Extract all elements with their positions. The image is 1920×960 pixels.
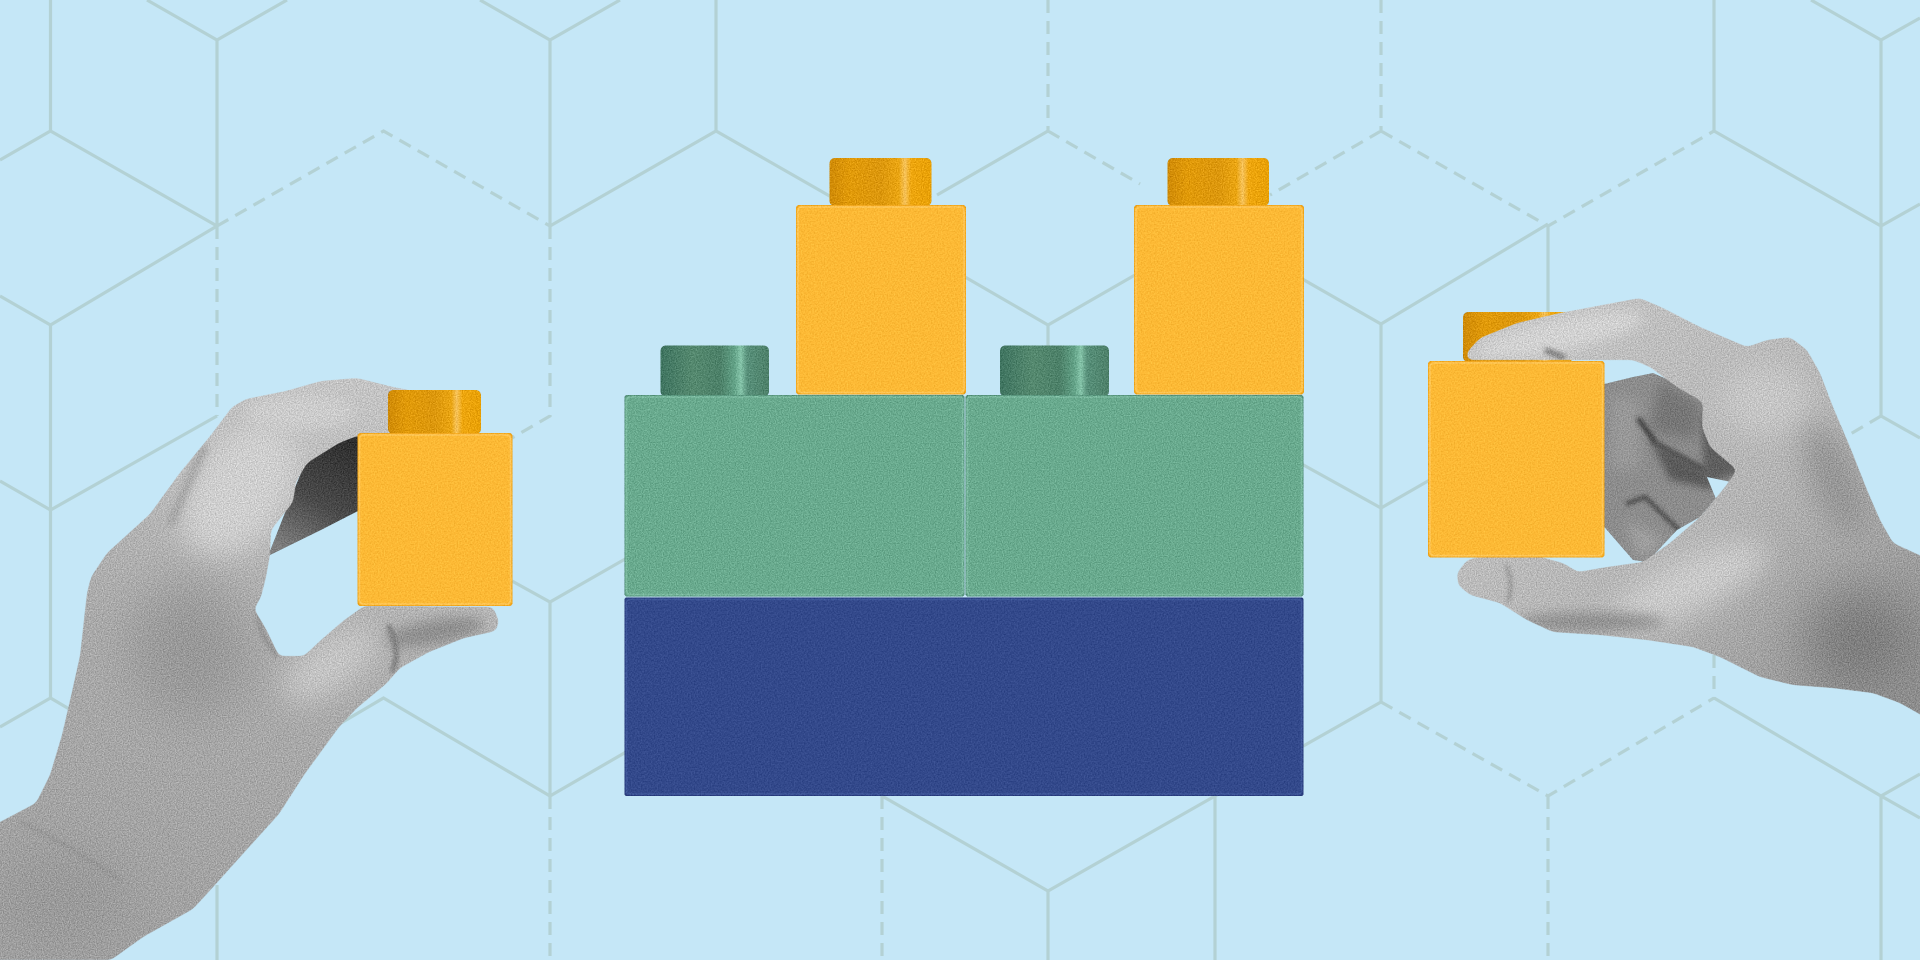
stud: held left brick [388,390,481,434]
gap between fingers and palm [1707,477,1731,499]
hand [1450,290,1920,730]
stud: green right [1000,346,1109,396]
hand [0,370,510,960]
left hand holding a yellow brick [0,370,512,960]
right hand holding a yellow brick [1428,290,1920,730]
brick: held right [1428,361,1604,558]
shadowed fingers behind brick [268,430,360,556]
brick: held left [358,433,512,606]
building block stack [624,158,1304,796]
curled fingers behind brick [1604,373,1735,562]
stud: yellow left [830,158,932,206]
stud: held right brick [1463,312,1573,362]
brick: yellow left [796,205,966,394]
brick: green right [966,395,1304,596]
stud: green left [660,346,769,396]
stud: yellow right [1168,158,1269,206]
brick: yellow right [1134,205,1304,394]
brick: green left [624,395,964,596]
brick: blue base [624,598,1304,796]
